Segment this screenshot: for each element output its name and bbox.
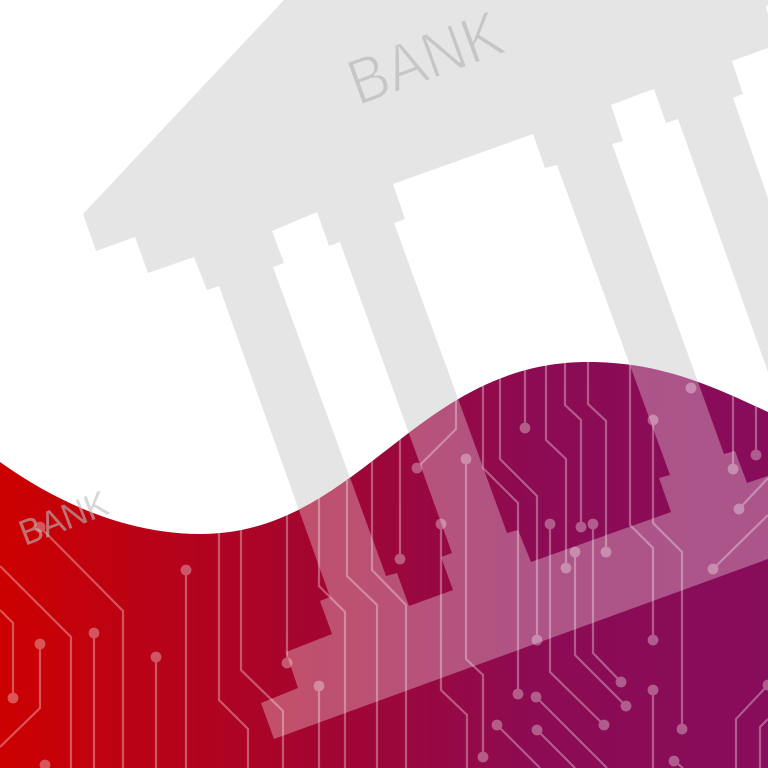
red to purple wave panel (0, 362, 768, 768)
bank sign text: BANK (338, 0, 513, 120)
small bank label on wave edge: BANK (14, 483, 114, 554)
translucent bank overlay inside wave (261, 364, 768, 739)
circuit board traces and nodes (0, 355, 768, 768)
